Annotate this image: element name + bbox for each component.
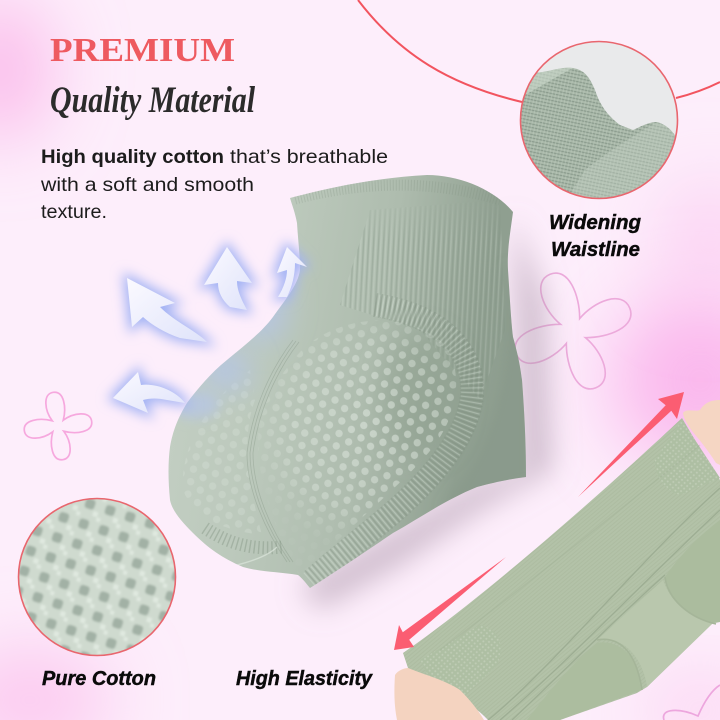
label: widening waistline: Widening (549, 212, 641, 234)
darker outer side (464, 330, 521, 492)
fold lines (440, 445, 720, 720)
blue glow over garment (248, 298, 297, 348)
body text: texture. (41, 201, 107, 223)
gusset trim (597, 577, 716, 690)
circle: widening waistline detail (520, 40, 678, 200)
title: premium: PREMIUM (50, 32, 235, 69)
bottom patch (420, 625, 501, 695)
subtitle: quality material: Quality Material (50, 80, 256, 121)
dots right cheek (267, 322, 456, 528)
arrow: left (113, 372, 185, 413)
stretched garment (403, 418, 720, 720)
upper pocket (665, 520, 720, 623)
flower outline left (20, 388, 96, 464)
body text: High quality cotton (41, 146, 224, 168)
dots left cheek (186, 400, 261, 533)
breathability arrows (113, 247, 307, 413)
body text (40, 146, 388, 223)
garment shadow (300, 215, 552, 610)
main garment: high waist brief (168, 175, 530, 590)
main band (403, 418, 720, 720)
arrow glow (113, 247, 307, 413)
label: high elasticity: High Elasticity (236, 668, 373, 690)
label: widening waistline: Waistline (551, 239, 640, 261)
gusset (597, 580, 713, 687)
cheek ribs (310, 305, 472, 582)
arrow: stretch up right (578, 392, 684, 497)
hand: top right (683, 400, 720, 465)
arrow: upper left (127, 278, 207, 342)
body text: with a soft and smooth (40, 174, 254, 196)
heart outline bottom right (663, 685, 720, 720)
hand: bottom left (394, 668, 484, 720)
arrow: stretch down left (394, 557, 506, 650)
circle: pure cotton fabric detail (18, 498, 176, 656)
arrow: up (204, 247, 252, 310)
label: pure cotton: Pure Cotton (42, 668, 156, 690)
lower left ribs (205, 528, 282, 548)
left seam (247, 340, 299, 562)
label: widening waistline (549, 212, 641, 261)
top patch (655, 420, 720, 495)
gusset seam (237, 546, 278, 565)
lower pocket (527, 642, 641, 720)
decorative red curve (358, 0, 720, 102)
right cheek texture (388, 352, 423, 426)
waistband edge (295, 185, 500, 200)
flower outline right (493, 251, 653, 411)
body text: that’s breathable (230, 146, 388, 168)
arrow: up right (277, 247, 307, 297)
waist ribs (340, 216, 504, 398)
